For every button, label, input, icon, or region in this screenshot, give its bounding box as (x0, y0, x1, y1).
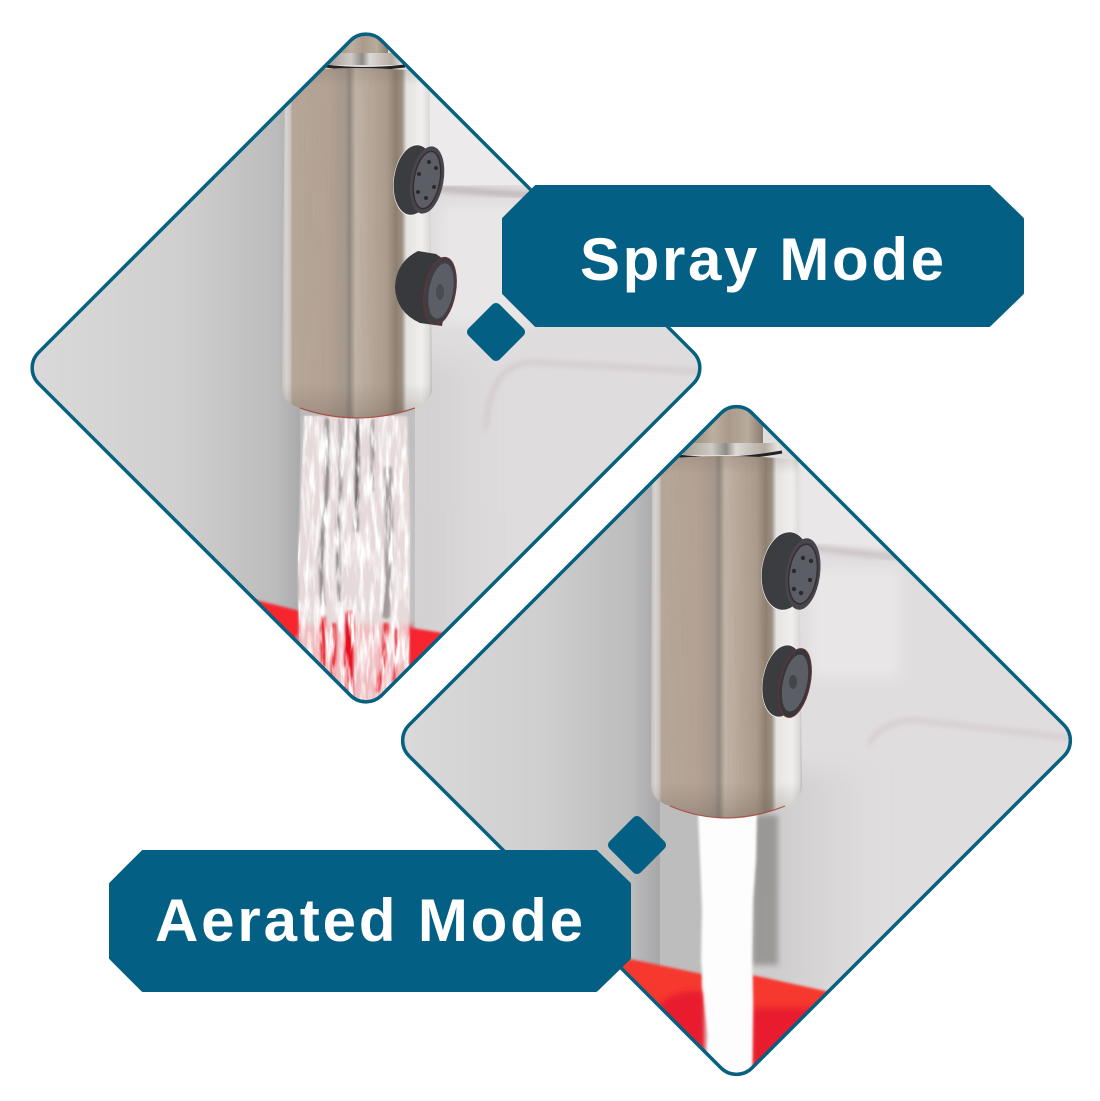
photo: spray mode scene (20, 20, 720, 720)
button: spray selector (761, 532, 820, 610)
icon: small diamond connector, aerated (606, 814, 668, 876)
button: aerated selector (762, 645, 812, 718)
callout: spray mode label (504, 187, 1022, 325)
water stream (698, 812, 757, 1085)
frame: aerated diamond outline (394, 398, 1079, 1083)
faucet stem (340, 36, 388, 53)
water spray (298, 416, 410, 710)
panel: aerated mode photo (390, 390, 1090, 1090)
faucet ring (325, 66, 405, 68)
faucet body (651, 456, 802, 818)
faucet body (282, 68, 432, 418)
label text: aerated mode: Aerated Mode (155, 887, 583, 954)
icon: small diamond connector, spray (465, 301, 527, 363)
button: spray selector (393, 144, 444, 216)
frame: spray diamond outline (23, 25, 709, 711)
button: aerated selector (395, 251, 461, 327)
photo: aerated mode scene (404, 408, 1068, 1066)
faucet ring (678, 452, 782, 458)
faucet collar (329, 53, 403, 65)
label text: spray mode: Spray Mode (580, 226, 944, 293)
faucet collar (683, 443, 779, 455)
panel: spray mode photo (20, 20, 720, 720)
callout: aerated mode label (111, 852, 629, 990)
faucet stem (694, 408, 763, 443)
